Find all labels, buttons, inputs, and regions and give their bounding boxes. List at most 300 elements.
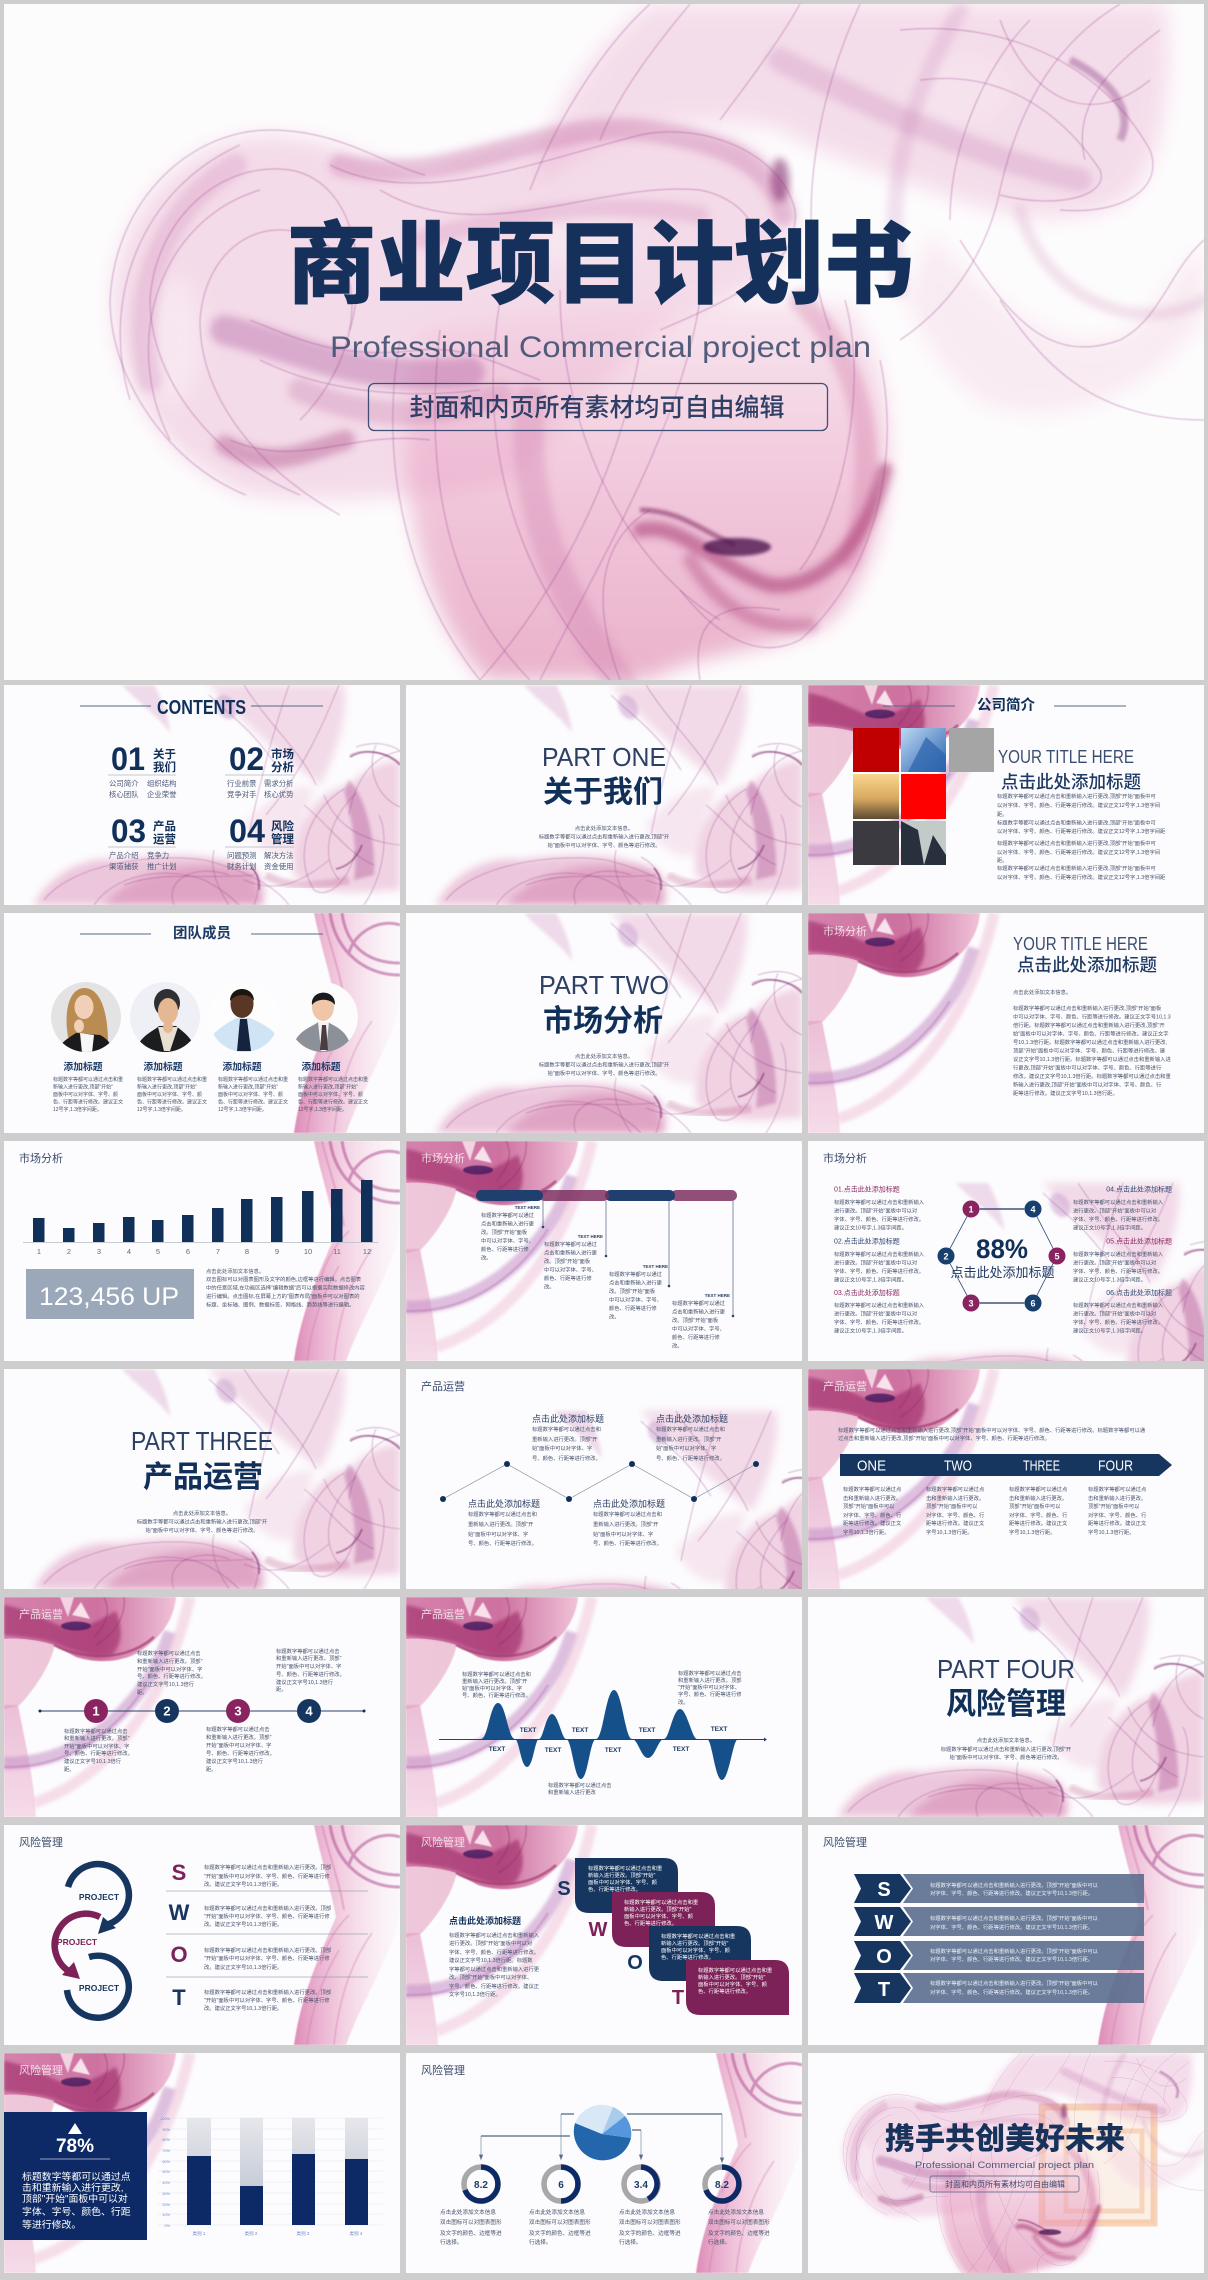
text block 3: 颜色、行距等进行修 xyxy=(609,1304,657,1312)
text block 1: 标题数字等都可以通过 xyxy=(481,1211,535,1219)
closing subtitle: Professional Commercial project plan xyxy=(915,2160,1094,2170)
pie chart xyxy=(574,2105,631,2160)
card T xyxy=(686,1960,789,2015)
swot texts: 改。建议正文字号10,1.3倍行距。 xyxy=(204,1963,282,1971)
wave labels: TEXT xyxy=(489,1746,505,1753)
section label: 市场分析 xyxy=(421,1151,465,1165)
arrow banner: THREE xyxy=(1023,1458,1060,1474)
card O: 面板中可以对字体、字号、颜 xyxy=(661,1946,731,1954)
member bios: 色、行距等进行修改。建议正文 xyxy=(137,1098,207,1106)
text block: upper right: 始"面板中可以对字体、字 xyxy=(656,1444,716,1452)
wave labels: TEXT xyxy=(605,1747,621,1754)
left text: 标题数字等都可以通过点击和重新输入 xyxy=(449,1931,540,1939)
text above step 4: 距。 xyxy=(276,1686,287,1693)
hexagon diagram: 3 xyxy=(968,1298,974,1308)
intro text: 过点击和重新输入进行更改,顶部"开始"面板中可以对字体、字号、颜色、行距等进行修改。 xyxy=(838,1434,1050,1442)
text block 3: 点击和重新输入进行更 xyxy=(609,1278,663,1286)
callout: total: 123,456 UP xyxy=(39,1283,179,1311)
text block: lower right: 始"面板中可以对字体、字 xyxy=(593,1530,653,1538)
right item 04 xyxy=(1073,1184,1172,1232)
text above step 2: 建议正文字号10,1.3倍行 xyxy=(137,1680,195,1688)
right item 06: 进行更改。顶部"开始"面板中可以对 xyxy=(1073,1310,1157,1318)
text left: 号、颜色、行距等进行修改。 xyxy=(462,1691,531,1699)
ring captions: 及文字的颜色、边框等进 xyxy=(619,2229,681,2237)
arrow banner xyxy=(840,1454,1172,1476)
body text: 距等进行修改。建议正文字号10,1.3倍行距。 xyxy=(1013,1089,1118,1097)
text block 1: 改。 xyxy=(481,1254,492,1262)
item 04: 财务计划 xyxy=(227,862,257,871)
column texts: 击和重新输入进行更改。 xyxy=(1009,1494,1067,1502)
card S: 标题数字等都可以通过点击和重 xyxy=(588,1864,663,1872)
description: 双击图标可以对图表图形及文字的颜色,边框等进行编辑。点击图表 xyxy=(206,1275,362,1283)
part label: PART ONE xyxy=(542,742,666,772)
zigzag line xyxy=(440,1461,759,1502)
smoke background xyxy=(808,913,994,1133)
left text: 改。顶部"开始"面板中可以对字体、 xyxy=(449,1973,532,1981)
cycle labels: PROJECT xyxy=(57,1937,98,1947)
ring captions: 点击此处添加文本信息 xyxy=(529,2208,585,2216)
panel: cover slide xyxy=(4,4,1204,680)
body text: 标题数字等都可以通过点击和重新输入进行更改,顶部"开始"面板中可 xyxy=(997,839,1157,847)
subtitle: Professional Commercial project plan xyxy=(330,331,871,364)
ring numbers xyxy=(474,2180,729,2191)
stat card: 标题数字等都可以通过点 xyxy=(22,2170,131,2183)
section label: 产品运营 xyxy=(19,1607,63,1621)
swot letters xyxy=(169,1860,190,2010)
left item 01: 进行更改。顶部"开始"面板中可以对 xyxy=(834,1206,918,1214)
part title: 产品运营 xyxy=(143,1461,263,1494)
text above step 2: 和重新输入进行更改。顶部" xyxy=(137,1657,203,1665)
left item 01: 字体、字号、颜色、行距等进行修改。 xyxy=(834,1215,924,1223)
bar chart: 7 xyxy=(216,1247,220,1256)
card W: 色、行距等进行修改。 xyxy=(624,1919,677,1927)
text above step 2: 距。 xyxy=(137,1689,148,1696)
swot letters xyxy=(557,1878,684,2009)
left item 03 xyxy=(834,1288,925,1334)
arrow banner: TWO xyxy=(944,1458,972,1474)
body text: 标题数字等都可以通过点击和重新输入进行更改,顶部"开始"面板中可 xyxy=(997,792,1157,800)
member bios: 12号字,1.3倍字间距。 xyxy=(137,1106,186,1113)
bar chart: 11 xyxy=(333,1247,341,1256)
left text: 字体、字号、颜色、行距等进行修改。 xyxy=(449,1948,539,1956)
text block 3: 改。顶部"开始"面板 xyxy=(609,1287,656,1295)
body text: 距。 xyxy=(997,811,1008,818)
column texts: 顶部"开始"面板中可以 xyxy=(926,1502,978,1510)
part title: 风险管理 xyxy=(946,1688,1066,1721)
card S: 面板中可以对字体、字号、颜 xyxy=(588,1878,658,1886)
text block: lower right: 号、颜色、行距等进行修改。 xyxy=(593,1539,662,1547)
text below step 1: 开始"面板中可以对字体、字 xyxy=(64,1742,129,1750)
description: 中的任意区域,在功能区选择"编辑数据"后可以根据实际数据修改内容 xyxy=(206,1284,366,1292)
card T: 标题数字等都可以通过点击和重 xyxy=(698,1966,773,1974)
hexagon diagram: 1 xyxy=(968,1204,974,1214)
english heading: YOUR TITLE HERE xyxy=(1013,934,1148,954)
tagline box xyxy=(368,384,828,430)
description: 标题数字等都可以通过点击和重新输入进行更改,顶部"开 xyxy=(539,1060,670,1068)
text block 3 xyxy=(609,1264,668,1320)
smoke background xyxy=(838,1597,1204,1817)
left item 03: 进行更改。顶部"开始"面板中可以对 xyxy=(834,1310,918,1318)
swot texts: 标题数字等都可以通过点击和重新输入进行更改。顶部 xyxy=(204,1863,332,1871)
section label: 产品运营 xyxy=(823,1379,867,1393)
text block 4: 标题数字等都可以通过 xyxy=(672,1299,726,1307)
smoke background xyxy=(34,685,400,905)
panel: risk swot cards xyxy=(406,1825,802,2045)
body text: 标题数字等都可以通过点击和重新输入进行更改,顶部"开始"面板中可 xyxy=(997,818,1157,826)
left item 03: 03.点击此处添加标题 xyxy=(834,1288,900,1297)
stacked bar chart: 30% xyxy=(162,2192,171,2196)
stacked bar chart: 类别 2 xyxy=(245,2230,258,2237)
left item 03: 字体、字号、颜色、行距等进行修改。 xyxy=(834,1318,924,1326)
text left: 始"面板中可以对字体、字 xyxy=(462,1684,522,1692)
wave labels: TEXT xyxy=(520,1727,536,1734)
text block: lower right: 点击此处添加标题 xyxy=(593,1498,665,1509)
item 03: 产品介绍 xyxy=(109,851,139,860)
swot letters: O xyxy=(170,1942,188,1967)
stat card xyxy=(4,2112,147,2240)
text block 2: 点击和重新输入进行更 xyxy=(544,1248,598,1256)
bar texts: 标题数字等都可以通过点击和重新输入进行更改。顶部"开始"面板中可以 xyxy=(930,1881,1099,1889)
smoke background xyxy=(696,2053,802,2273)
description: 进行编辑。点击图标,在屏幕上方的"图表布局"面板中可以对图表的 xyxy=(206,1292,360,1300)
swot texts: 标题数字等都可以通过点击和重新输入进行更改。顶部 xyxy=(204,1904,332,1912)
ring captions: 行选择。 xyxy=(440,2238,462,2246)
right item 06: 06.点击此处添加标题 xyxy=(1106,1288,1172,1297)
swot letters: S xyxy=(877,1879,891,1901)
smoke background xyxy=(466,1411,832,1631)
left heading: 点击此处添加标题 xyxy=(449,1915,521,1926)
ring captions: 点击此处添加文本信息 xyxy=(708,2208,764,2216)
stacked bar chart: 100% xyxy=(160,2117,171,2121)
ring captions: 双击图标可以对图表图形 xyxy=(619,2218,681,2226)
section label: 风险管理 xyxy=(19,1835,63,1849)
closing title: 携手共创美好未来 xyxy=(885,2123,1125,2156)
stat card: 顶部"开始"面板中可以对 xyxy=(22,2192,128,2205)
ring values xyxy=(464,2167,739,2201)
description: 始"面板中可以对字体、字号、颜色等进行修改。 xyxy=(949,1753,1063,1761)
swot texts: 标题数字等都可以通过点击和重新输入进行更改。顶部 xyxy=(204,1988,332,1996)
text above step 4: 建议正文字号10,1.3倍行 xyxy=(276,1678,334,1686)
panel: product steps xyxy=(4,1597,400,1817)
smoke background xyxy=(406,1597,592,1817)
item 01: 企业荣誉 xyxy=(147,790,177,799)
section label: 风险管理 xyxy=(421,2063,465,2077)
right item 05: 字体、字号、颜色、行距等进行修改。 xyxy=(1073,1267,1163,1275)
text block: upper left: 标题数字等都可以通过点击和 xyxy=(532,1425,601,1433)
smoke background xyxy=(294,1141,400,1361)
description: 点击此处添加文本信息。 xyxy=(977,1736,1035,1744)
stacked bar chart: 90% xyxy=(162,2128,171,2132)
item 02: 核心优势 xyxy=(264,790,294,799)
bar chart: 12 xyxy=(363,1247,371,1256)
smoke background xyxy=(808,1369,994,1589)
bar texts: 标题数字等都可以通过点击和重新输入进行更改。顶部"开始"面板中可以 xyxy=(930,1914,1099,1922)
bar chart: 3 xyxy=(97,1247,101,1256)
stat card: 等进行修改。 xyxy=(22,2218,81,2231)
text block: upper left xyxy=(532,1413,604,1462)
navy tags xyxy=(854,1874,911,2003)
column texts: 距等进行修改。建议正文 xyxy=(1088,1519,1147,1527)
timeline pointers xyxy=(542,1201,734,1317)
body text: 中可以对字体、字号、颜色、行距等进行修改。建议正文字号10,1.3 xyxy=(1013,1012,1171,1020)
bar texts: 对字体、字号、颜色、行距等进行修改。建议正文字号10,1.3倍行距。 xyxy=(930,1955,1093,1963)
card O: 新输入进行更改。顶部"开始" xyxy=(661,1939,728,1947)
hexagon diagram: 5 xyxy=(1054,1252,1060,1262)
text block 4: 颜色、行距等进行修 xyxy=(672,1333,720,1341)
column texts: 标题数字等都可以通过点 xyxy=(1088,1485,1147,1493)
column texts: 击和重新输入进行更改。 xyxy=(843,1494,901,1502)
swot dividers xyxy=(166,1891,368,1977)
text right: 标题数字等都可以通过点击 xyxy=(678,1669,742,1677)
ring numbers: 8.2 xyxy=(474,2180,488,2191)
bar chart: 4 xyxy=(127,1247,131,1256)
text right: 和重新输入进行更改。顶部 xyxy=(678,1676,742,1684)
member names: 添加标题 xyxy=(63,1060,103,1073)
item 02: 行业前景 xyxy=(227,779,257,788)
column texts xyxy=(843,1485,1147,1536)
swot texts xyxy=(204,1863,332,2012)
text block: lower left xyxy=(468,1498,540,1547)
stacked bar chart: 60% xyxy=(162,2160,171,2164)
swot letters: O xyxy=(876,1946,892,1968)
smoke background xyxy=(436,913,802,1133)
description: 点击此处添加文本信息。 xyxy=(575,824,633,832)
text block 1: 改。顶部"开始"面板 xyxy=(481,1228,528,1236)
text above step 2: 号、颜色、行距等进行修改。 xyxy=(137,1672,206,1680)
text block 4: TEXT HERE xyxy=(705,1293,730,1298)
right item 05: 标题数字等都可以通过点击和重新输入 xyxy=(1073,1250,1164,1258)
member bios: 色、行距等进行修改。建议正文 xyxy=(218,1098,288,1106)
right item 06: 字体、字号、颜色、行距等进行修改。 xyxy=(1073,1318,1163,1326)
item 04: 04 xyxy=(229,813,265,849)
smoke background xyxy=(34,1369,400,1589)
text block: lower left: 标题数字等都可以通过点击和 xyxy=(468,1510,537,1518)
item 01: 公司简介 xyxy=(109,779,139,788)
bar texts: 标题数字等都可以通过点击和重新输入进行更改。顶部"开始"面板中可以 xyxy=(930,1979,1099,1987)
description: 始"面板中可以对字体、字号、颜色等进行修改。 xyxy=(547,1069,661,1077)
closing tagline box: 封面和内页所有素材均可自由编辑 xyxy=(945,2179,1065,2189)
column texts: 距等进行修改。建议正文 xyxy=(843,1519,902,1527)
panel: risk swot cycle xyxy=(4,1825,400,2045)
ring numbers: 3.4 xyxy=(634,2180,648,2191)
description: 标题、坐标轴、图例、数据标签、网格线、趋势线等进行编辑。 xyxy=(206,1300,354,1308)
card S: 色、行距等进行修改。 xyxy=(588,1885,641,1893)
bar texts: 对字体、字号、颜色、行距等进行修改。建议正文字号10,1.3倍行距。 xyxy=(930,1923,1093,1931)
card S: 新输入进行更改。顶部"开始" xyxy=(588,1871,655,1879)
card S xyxy=(575,1858,678,1913)
panel: contents xyxy=(4,685,400,905)
swot letters: W xyxy=(589,1919,608,1941)
text block 1: 中可以对字体、字号、 xyxy=(481,1236,534,1244)
right item 06: 标题数字等都可以通过点击和重新输入 xyxy=(1073,1301,1164,1309)
bar chart: 2 xyxy=(67,1247,71,1256)
text above step 4: 标题数字等都可以通过点击 xyxy=(276,1647,340,1655)
text below step 3: 标题数字等都可以通过点击 xyxy=(206,1725,270,1733)
part label: PART THREE xyxy=(131,1426,273,1456)
text above step 4: 开始"面板中可以对字体、字 xyxy=(276,1662,341,1670)
text above step 2: 标题数字等都可以通过点击 xyxy=(137,1649,201,1657)
column texts: 顶部"开始"面板中可以 xyxy=(1009,1502,1061,1510)
stacked bar chart: 40% xyxy=(162,2181,171,2185)
column texts: 对字体、字号、颜色、行 xyxy=(843,1511,902,1519)
wave labels xyxy=(489,1726,727,1754)
member bios: 新输入进行更改,顶部"开始" xyxy=(53,1084,113,1090)
chinese heading: 点击此处添加标题 xyxy=(1017,955,1157,975)
card T: 面板中可以对字体、字号、颜 xyxy=(698,1980,768,1988)
body text: 号10,1.3倍行距。标题数字等都可以通过点击和重新输入进行更改, xyxy=(1013,1038,1167,1046)
left text: 字等都可以通过点击和重新输入进行更 xyxy=(449,1965,540,1973)
text block 1: 颜色、行距等进行修 xyxy=(481,1245,529,1253)
text block 2: 中可以对字体、字号、 xyxy=(544,1266,597,1274)
grey bars xyxy=(903,1874,1144,2003)
column texts: 顶部"开始"面板中可以 xyxy=(1088,1502,1140,1510)
column texts: 字号10,1.3倍行距。 xyxy=(843,1528,890,1536)
step line with numbered circles: 4 xyxy=(305,1704,313,1718)
stacked bar chart xyxy=(158,2117,383,2237)
card O: 色、行距等进行修改。 xyxy=(661,1953,714,1961)
ring captions: 点击此处添加文本信息 xyxy=(619,2208,675,2216)
hexagon diagram: 点击此处添加标题 xyxy=(950,1265,1055,1280)
section label: 产品运营 xyxy=(421,1379,465,1393)
item 02: 02 xyxy=(229,741,264,777)
wave labels: TEXT xyxy=(639,1727,655,1734)
panel: team xyxy=(4,913,400,1133)
item 01: 组织结构 xyxy=(147,779,177,788)
chinese heading: 点击此处添加标题 xyxy=(1001,772,1141,792)
wave labels: TEXT xyxy=(572,1727,588,1734)
item 02: 分析 xyxy=(271,760,294,774)
item 01: 我们 xyxy=(153,760,176,774)
swot letters: S xyxy=(557,1878,571,1900)
right item 06: 建议正文10号字,1.3倍字间距。 xyxy=(1073,1326,1146,1334)
column texts: 标题数字等都可以通过点 xyxy=(926,1485,985,1493)
item 04: 解决方法 xyxy=(264,851,294,860)
left text: 建议正文字号10,1.3倍行距。标题数 xyxy=(449,1956,533,1964)
member bios: 面板中可以对字体、字号、颜 xyxy=(218,1091,283,1098)
item 01: 核心团队 xyxy=(109,790,139,799)
member names xyxy=(63,1060,341,1073)
text below step 1: 号、颜色、行距等进行修改。 xyxy=(64,1749,133,1757)
member bios: 新输入进行更改,顶部"开始" xyxy=(218,1084,278,1090)
swot letters: T xyxy=(878,1979,890,2001)
text block 4: 点击和重新输入进行更 xyxy=(672,1308,726,1316)
swot letters: S xyxy=(172,1860,186,1885)
smoke background xyxy=(843,2053,1204,2276)
member bios: 12号字,1.3倍字间距。 xyxy=(218,1106,267,1113)
text bottom: 标题数字等都可以通过点击 xyxy=(548,1781,612,1789)
item 03: 竞争力 xyxy=(147,851,169,860)
smoke background xyxy=(868,1183,1208,1403)
smoke background xyxy=(4,2053,190,2273)
description: 始"面板中可以对字体、字号、颜色等进行修改。 xyxy=(145,1526,259,1534)
bar chart xyxy=(23,1180,378,1256)
description: 点击此处添加文本信息。 xyxy=(206,1267,264,1275)
text below step 3: 号、颜色、行距等进行修改。 xyxy=(206,1749,275,1757)
text block 2: 改。顶部"开始"面板 xyxy=(544,1257,591,1265)
member names: 添加标题 xyxy=(143,1060,183,1073)
column texts: 字号10,1.3倍行距。 xyxy=(1009,1528,1056,1536)
swot texts: 改。建议正文字号10,1.3倍行距。 xyxy=(204,1920,282,1928)
text above step 2: 开始"面板中可以对字体、字 xyxy=(137,1665,202,1673)
callout: total xyxy=(26,1269,194,1319)
stacked bar chart: 类别 1 xyxy=(193,2230,206,2237)
body text: 新输入进行更改,顶部"开始"面板中可以对字体、字号、颜色、行 xyxy=(1013,1080,1162,1088)
text block 4: 改。顶部"开始"面板 xyxy=(672,1316,719,1324)
right item 04: 进行更改。顶部"开始"面板中可以对 xyxy=(1073,1206,1157,1214)
bar chart: 9 xyxy=(275,1247,279,1256)
smoke background xyxy=(406,1825,592,2045)
item 03: 03 xyxy=(111,813,146,849)
text left: 标题数字等都可以通过点击和 xyxy=(462,1670,531,1678)
swot letters xyxy=(875,1879,894,2001)
smoke background xyxy=(4,1597,190,1817)
orange frames xyxy=(1042,2107,1154,2223)
panel: market bar chart xyxy=(4,1141,400,1361)
column texts: 对字体、字号、颜色、行 xyxy=(1088,1511,1147,1519)
text block: upper right: 点击此处添加标题 xyxy=(656,1413,728,1424)
text block 2: TEXT HERE xyxy=(578,1234,603,1239)
text block 3: 改。 xyxy=(609,1312,620,1320)
wave labels: TEXT xyxy=(545,1747,561,1754)
column texts: 距等进行修改。建议正文 xyxy=(926,1519,985,1527)
left item 02 xyxy=(834,1236,925,1284)
card O xyxy=(649,1926,751,1981)
left item 01 xyxy=(834,1184,925,1232)
left item 03: 建议正文10号字,1.3倍字间距。 xyxy=(834,1326,907,1334)
left item 01: 标题数字等都可以通过点击和重新输入 xyxy=(834,1198,925,1206)
member bios: 色、行距等进行修改。建议正文 xyxy=(298,1098,368,1106)
bar chart: 5 xyxy=(156,1247,160,1256)
description: 标题数字等都可以通过点击和重新输入进行更改,顶部"开 xyxy=(941,1745,1072,1753)
ring numbers: 8.2 xyxy=(715,2180,729,2191)
panel: company profile xyxy=(808,685,1204,905)
left text: 文字号10,1.3倍行距。 xyxy=(449,1990,501,1998)
body text: 标题数字等都可以通过点击和重新输入进行更改,顶部"开始"面板中可 xyxy=(997,864,1157,872)
smoke background xyxy=(436,685,802,905)
stat card: 78% xyxy=(56,2136,94,2157)
item 04: 管理 xyxy=(271,832,294,846)
item 03: 产品 xyxy=(153,819,176,833)
text block 2: 颜色、行距等进行修 xyxy=(544,1274,592,1282)
text bottom: 和重新输入进行更改 xyxy=(548,1788,596,1796)
bar texts xyxy=(930,1881,1099,1996)
member bios: 新输入进行更改,顶部"开始" xyxy=(298,1084,358,1090)
section label: 风险管理 xyxy=(823,1835,867,1849)
panel: product wave xyxy=(406,1597,802,1817)
text block: upper left: 点击此处添加标题 xyxy=(532,1413,604,1424)
text block: lower left: 始"面板中可以对字体、字 xyxy=(468,1530,528,1538)
text below step 3: 和重新输入进行更改。顶部" xyxy=(206,1733,272,1741)
text block 2: 改。 xyxy=(544,1282,555,1290)
smoke background xyxy=(1098,1825,1204,2045)
panel: risk swot banners xyxy=(808,1825,1204,2045)
text block: lower left: 号、颜色、行距等进行修改。 xyxy=(468,1539,537,1547)
heading: 公司简介 xyxy=(977,696,1035,714)
right item 06 xyxy=(1073,1288,1172,1334)
text block: upper left: 号、颜色、行距等进行修改。 xyxy=(532,1454,601,1462)
right item 04: 04.点击此处添加标题 xyxy=(1106,1184,1172,1194)
stacked bar chart: 80% xyxy=(162,2138,171,2142)
right item 04: 标题数字等都可以通过点击和重新输入 xyxy=(1073,1198,1164,1206)
tagline box: 封面和内页所有素材均可自由编辑 xyxy=(409,394,785,422)
item 04 xyxy=(225,813,294,871)
body text: 议正文字号10,1.3倍行距。标题数字等都可以通过点击和重新输入进 xyxy=(1013,1055,1171,1063)
card W: 标题数字等都可以通过点击和重 xyxy=(624,1898,699,1906)
bar chart: 1 xyxy=(37,1247,41,1256)
ring captions: 双击图标可以对图表图形 xyxy=(440,2218,502,2226)
heading: contents: CONTENTS xyxy=(157,697,246,719)
panel: part three xyxy=(4,1369,400,1589)
